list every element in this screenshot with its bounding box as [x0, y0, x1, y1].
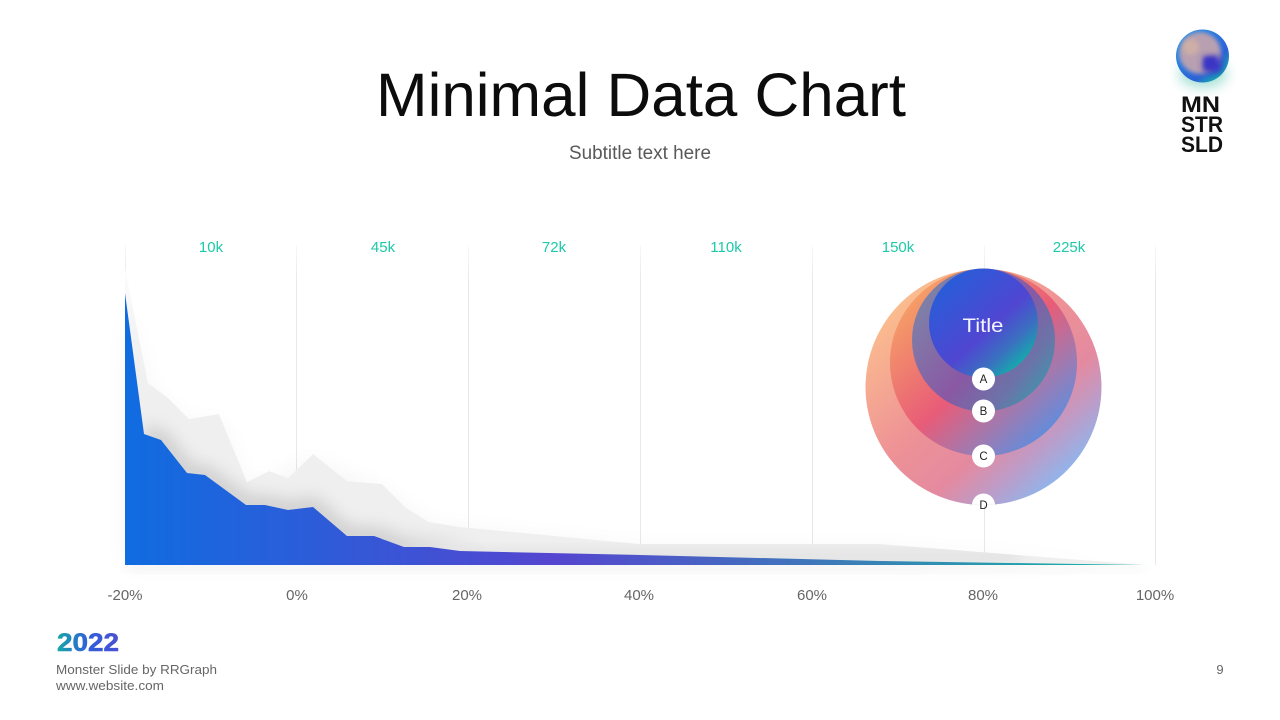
blue front area [125, 293, 1145, 565]
top value labels: 225k [1053, 239, 1086, 256]
x axis labels: 20% [452, 587, 482, 604]
top value labels: 150k [882, 239, 915, 256]
top value labels: 45k [371, 239, 396, 256]
logo text: SLD [1181, 132, 1223, 157]
x axis labels: 40% [624, 587, 654, 604]
chart soft shadow [125, 300, 1145, 572]
badge A: A [980, 374, 988, 386]
badge B [972, 400, 995, 422]
x axis labels: 0% [286, 587, 308, 604]
x axis labels: 100% [1136, 587, 1174, 604]
logo [1176, 30, 1229, 157]
logo text: MN [1181, 92, 1220, 117]
area chart [125, 260, 1155, 572]
vertical grid lines [126, 245, 1156, 565]
badge C: C [979, 451, 988, 463]
nested circles diagram [866, 268, 1102, 516]
circle B [912, 268, 1055, 412]
x axis labels: -20% [107, 587, 143, 604]
top value labels: 110k [710, 239, 742, 256]
grey back area [125, 260, 1155, 570]
logo text [1181, 92, 1223, 157]
footer year: 2022 [57, 629, 119, 657]
circle C [890, 269, 1077, 456]
top value labels [199, 239, 1086, 256]
title: Minimal Data Chart [376, 61, 906, 129]
badge B: B [980, 406, 988, 418]
badge D: D [979, 500, 988, 512]
icon: logo sphere [1176, 30, 1229, 88]
badge A [972, 368, 995, 390]
badge C [972, 444, 995, 468]
footer credit: Monster Slide by RRGraph [56, 663, 217, 677]
x axis labels: 60% [797, 587, 827, 604]
x axis labels: 80% [968, 587, 998, 604]
x axis labels [107, 587, 1174, 604]
circle title: Title [962, 316, 1004, 337]
logo text: STR [1181, 112, 1223, 137]
circle A [929, 268, 1038, 378]
footer credit: www.website.com [55, 679, 164, 693]
top value labels: 72k [542, 239, 567, 256]
circle D [866, 269, 1102, 505]
badge D [972, 494, 995, 509]
subtitle: Subtitle text here [569, 143, 711, 164]
footer credit [55, 663, 217, 693]
page number: 9 [1216, 662, 1224, 677]
top value labels: 10k [199, 239, 224, 256]
